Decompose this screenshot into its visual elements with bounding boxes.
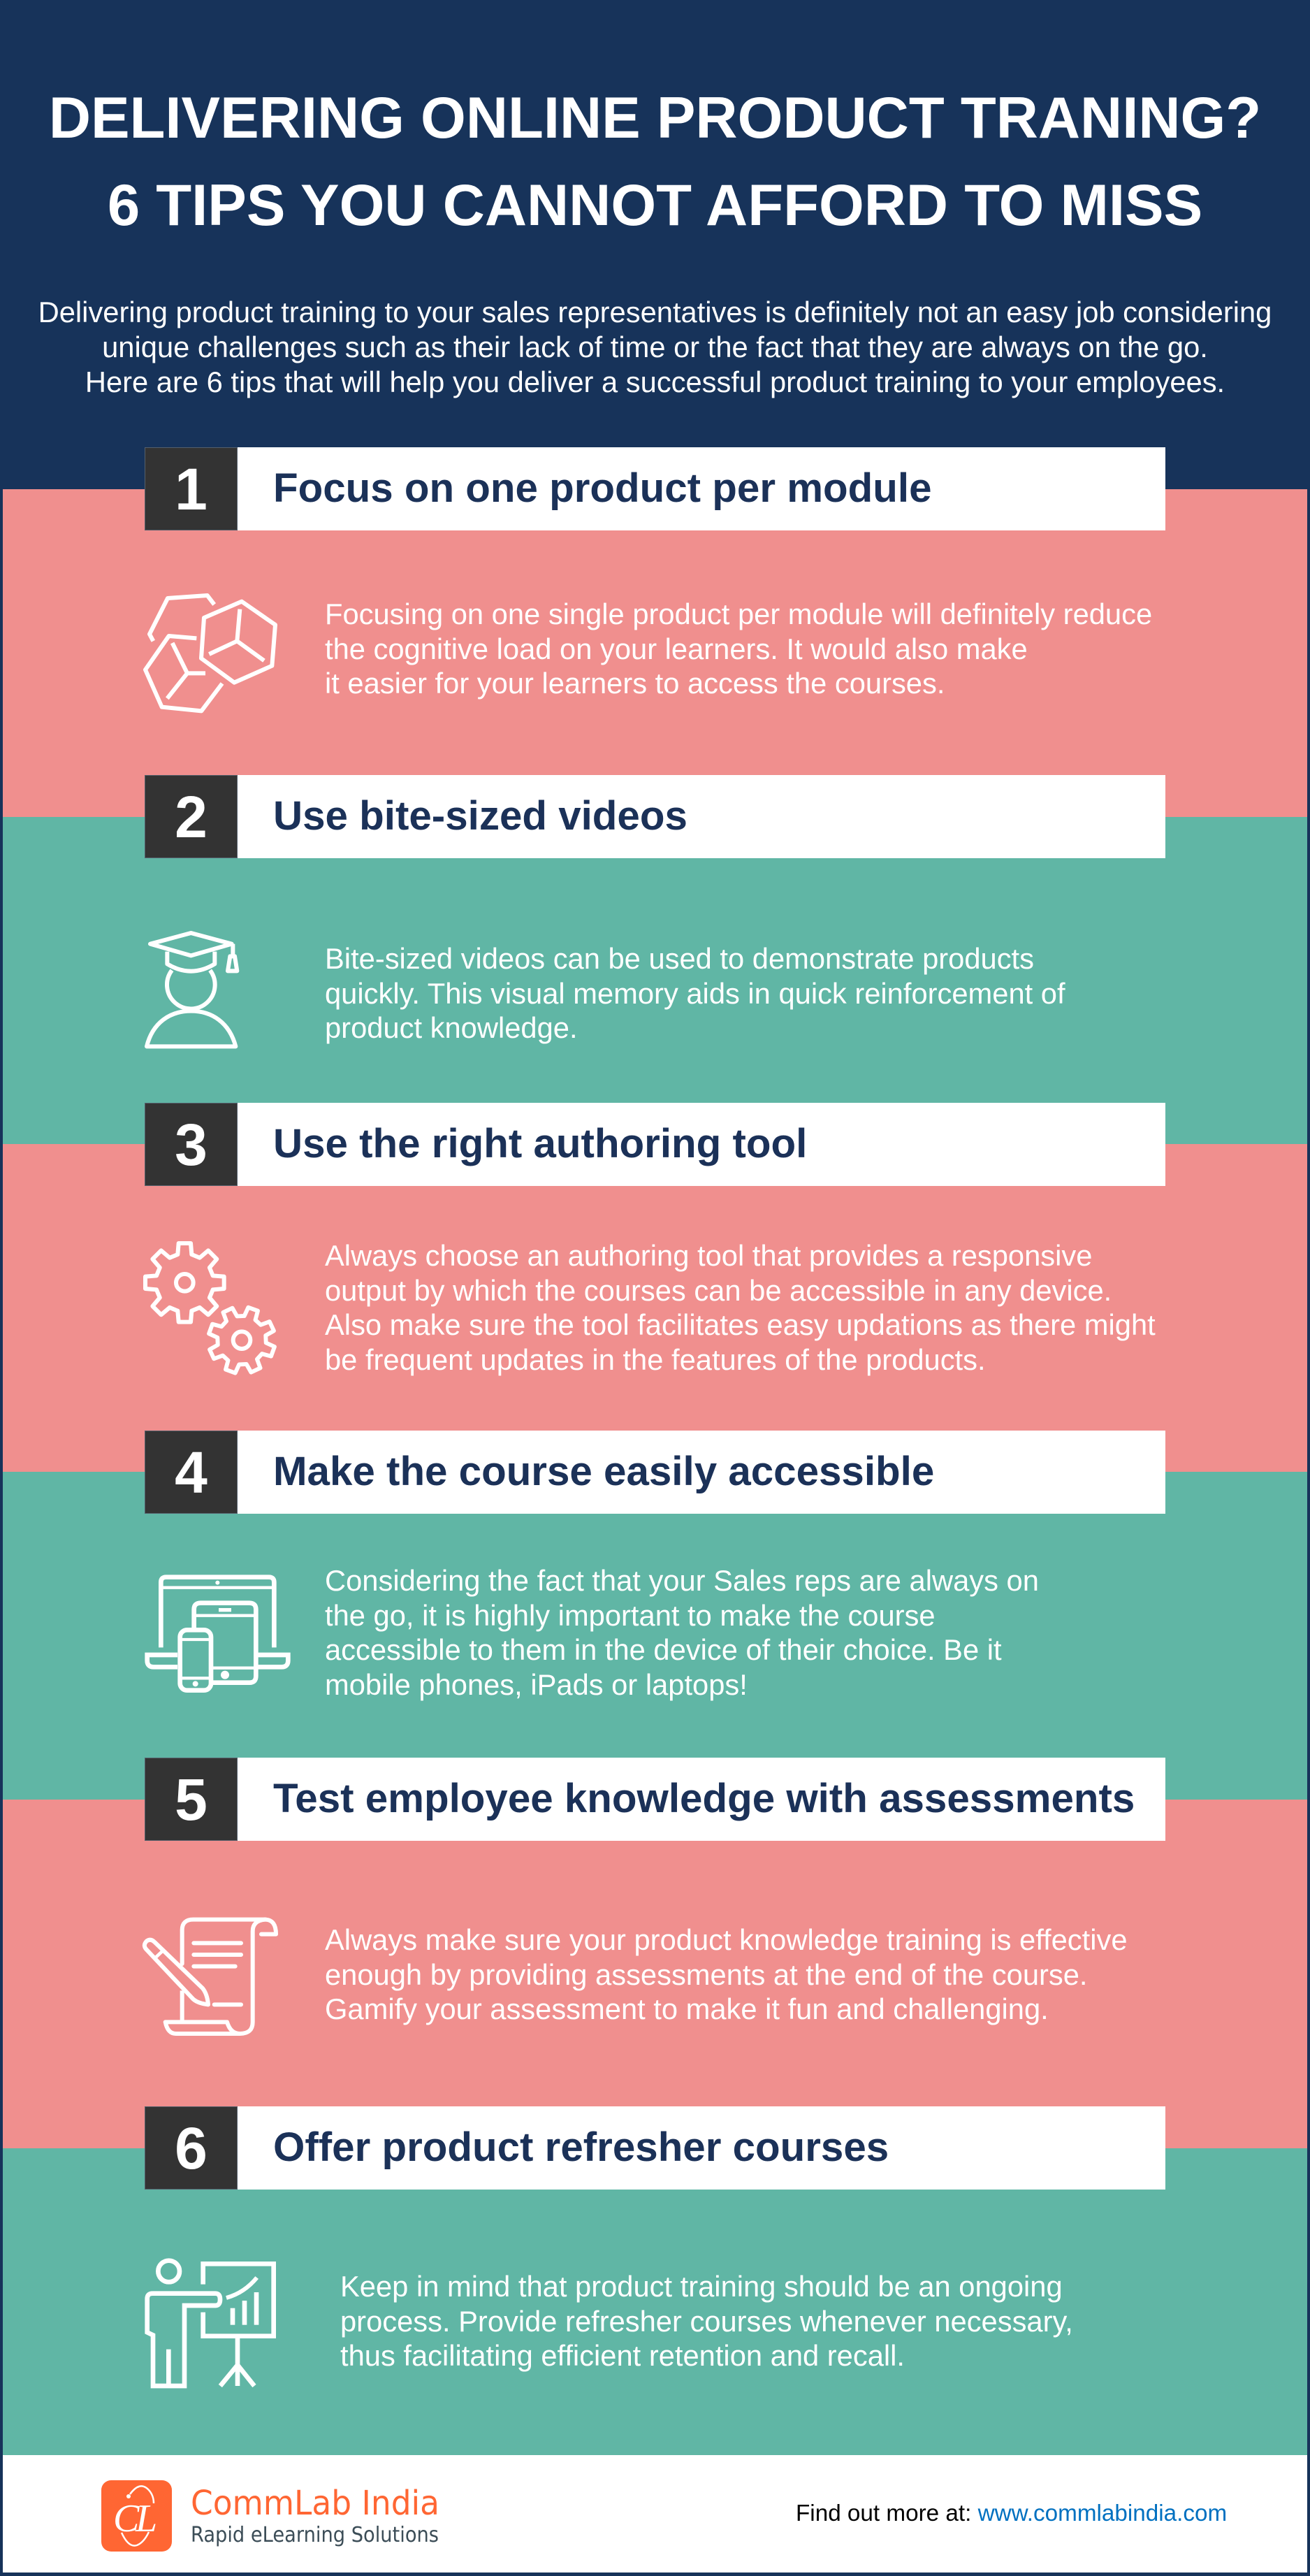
footer bbox=[3, 2455, 1307, 2573]
tip 4 text: mobile phones, iPads or laptops! bbox=[325, 1667, 748, 1701]
tip 1 text bbox=[325, 598, 1152, 700]
tip 3 text: Also make sure the tool facilitates easy updations as there might bbox=[325, 1308, 1156, 1341]
tip 5 text: enough by providing assessments at the end of the course. bbox=[325, 1958, 1088, 1990]
icon: graduate bbox=[145, 931, 239, 1048]
panel: tip 5 bbox=[3, 1758, 1307, 2148]
tip 5 text: Always make sure your product knowledge training is effective bbox=[325, 1923, 1128, 1956]
icon: hexagonal product cubes bbox=[143, 593, 277, 713]
title: DELIVERING ONLINE PRODUCT TRANING? bbox=[49, 85, 1261, 150]
logo: CommLab India: L bbox=[135, 2497, 157, 2540]
tip 2 text: product knowledge. bbox=[325, 1011, 578, 1044]
tip 3 heading bar bbox=[145, 1103, 1165, 1186]
tip 6 text: thus facilitating efficient retention and recall. bbox=[340, 2339, 905, 2372]
tip 4 heading bar bbox=[145, 1431, 1165, 1514]
icon: presenter with chart bbox=[145, 2258, 276, 2389]
tip 1 text: it easier for your learners to access the courses. bbox=[325, 667, 945, 700]
title bbox=[49, 85, 1261, 238]
panel: tip 2 bbox=[3, 775, 1307, 1144]
tip 4 heading bar: Make the course easily accessible bbox=[273, 1449, 934, 1494]
tip 2 text bbox=[325, 942, 1065, 1044]
logo: CommLab India: C bbox=[113, 2497, 140, 2540]
icon: gears bbox=[143, 1241, 277, 1375]
intro text bbox=[38, 296, 1272, 398]
tip 6 heading bar: 6 bbox=[175, 2115, 208, 2181]
tip 2 heading bar bbox=[145, 775, 1165, 858]
intro text: unique challenges such as their lack of time or the fact that they are always on the go. bbox=[102, 331, 1208, 363]
logo: CommLab India: CommLab India bbox=[191, 2484, 439, 2523]
panel: tip 6 bbox=[3, 2106, 1307, 2455]
find out more link: Find out more at: www.commlabindia.com bbox=[796, 2501, 1227, 2526]
tip 5 heading bar: 5 bbox=[175, 1767, 208, 1832]
logo: CommLab India: Rapid eLearning Solutions bbox=[191, 2523, 439, 2547]
title: 6 TIPS YOU CANNOT AFFORD TO MISS bbox=[108, 173, 1202, 238]
tip 3 text: Always choose an authoring tool that provides a responsive bbox=[325, 1239, 1092, 1272]
tip 4 heading bar: 4 bbox=[175, 1440, 208, 1505]
tip 2 heading bar: Use bite-sized videos bbox=[273, 793, 687, 839]
intro text: Here are 6 tips that will help you deliver a successful product training to your employees. bbox=[85, 366, 1225, 398]
tip 5 text bbox=[325, 1923, 1128, 2025]
tip 4 text: accessible to them in the device of their choice. Be it bbox=[325, 1633, 1002, 1666]
tip 2 text: Bite-sized videos can be used to demonstrate products bbox=[325, 942, 1034, 975]
tip 4 text bbox=[325, 1564, 1039, 1701]
tip 3 heading bar: 3 bbox=[175, 1112, 208, 1178]
tip 5 text: Gamify your assessment to make it fun and challenging. bbox=[325, 1992, 1049, 2025]
tip 6 heading bar: Offer product refresher courses bbox=[273, 2125, 889, 2170]
tip 5 heading bar: Test employee knowledge with assessments bbox=[273, 1776, 1135, 1821]
tip 1 heading bar: 1 bbox=[175, 456, 208, 522]
tip 4 text: the go, it is highly important to make the course bbox=[325, 1599, 936, 1631]
tip 6 text: Keep in mind that product training should be an ongoing bbox=[340, 2270, 1063, 2303]
panel: tip 3 bbox=[3, 1103, 1307, 1472]
tip 2 text: quickly. This visual memory aids in quick reinforcement of bbox=[325, 977, 1065, 1009]
tip 1 text: the cognitive load on your learners. It would also make bbox=[325, 632, 1028, 665]
tip 1 text: Focusing on one single product per module will definitely reduce bbox=[325, 598, 1152, 630]
panel: tip 4 bbox=[3, 1431, 1307, 1800]
tip 3 heading bar: Use the right authoring tool bbox=[273, 1121, 807, 1166]
logo: CommLab India bbox=[101, 2480, 439, 2552]
panel: tip 1 bbox=[3, 447, 1307, 817]
tip 4 text: Considering the fact that your Sales reps are always on bbox=[325, 1564, 1039, 1597]
tip 3 text bbox=[325, 1239, 1156, 1375]
tip 6 heading bar bbox=[145, 2106, 1165, 2190]
tip 3 text: be frequent updates in the features of the products. bbox=[325, 1343, 986, 1375]
tip 6 text: process. Provide refresher courses whenever necessary, bbox=[340, 2305, 1073, 2337]
tip 1 heading bar bbox=[145, 447, 1165, 530]
icon: laptop, tablet and phone bbox=[145, 1575, 291, 1693]
icon: scroll and pencil bbox=[143, 1918, 278, 2036]
tip 6 text bbox=[340, 2270, 1073, 2372]
tip 2 heading bar: 2 bbox=[175, 784, 208, 850]
tip 5 heading bar bbox=[145, 1758, 1165, 1841]
intro text: Delivering product training to your sales representatives is definitely not an easy job considering bbox=[38, 296, 1272, 328]
tip 1 heading bar: Focus on one product per module bbox=[273, 465, 932, 511]
tip 3 text: output by which the courses can be accessible in any device. bbox=[325, 1273, 1112, 1307]
